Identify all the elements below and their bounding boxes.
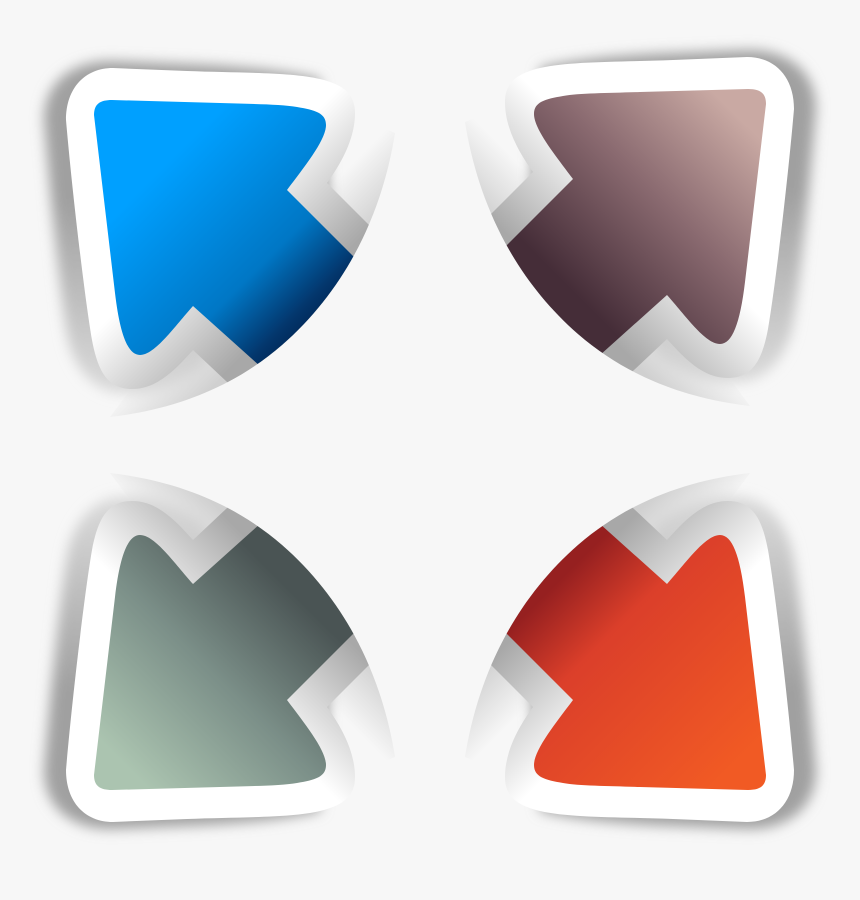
arrow: grey-green, bottom left (44, 473, 398, 829)
arrow: brown, top right (462, 50, 816, 406)
arrow: blue, top left (44, 61, 398, 417)
arrow: red-orange, bottom right (462, 473, 816, 829)
